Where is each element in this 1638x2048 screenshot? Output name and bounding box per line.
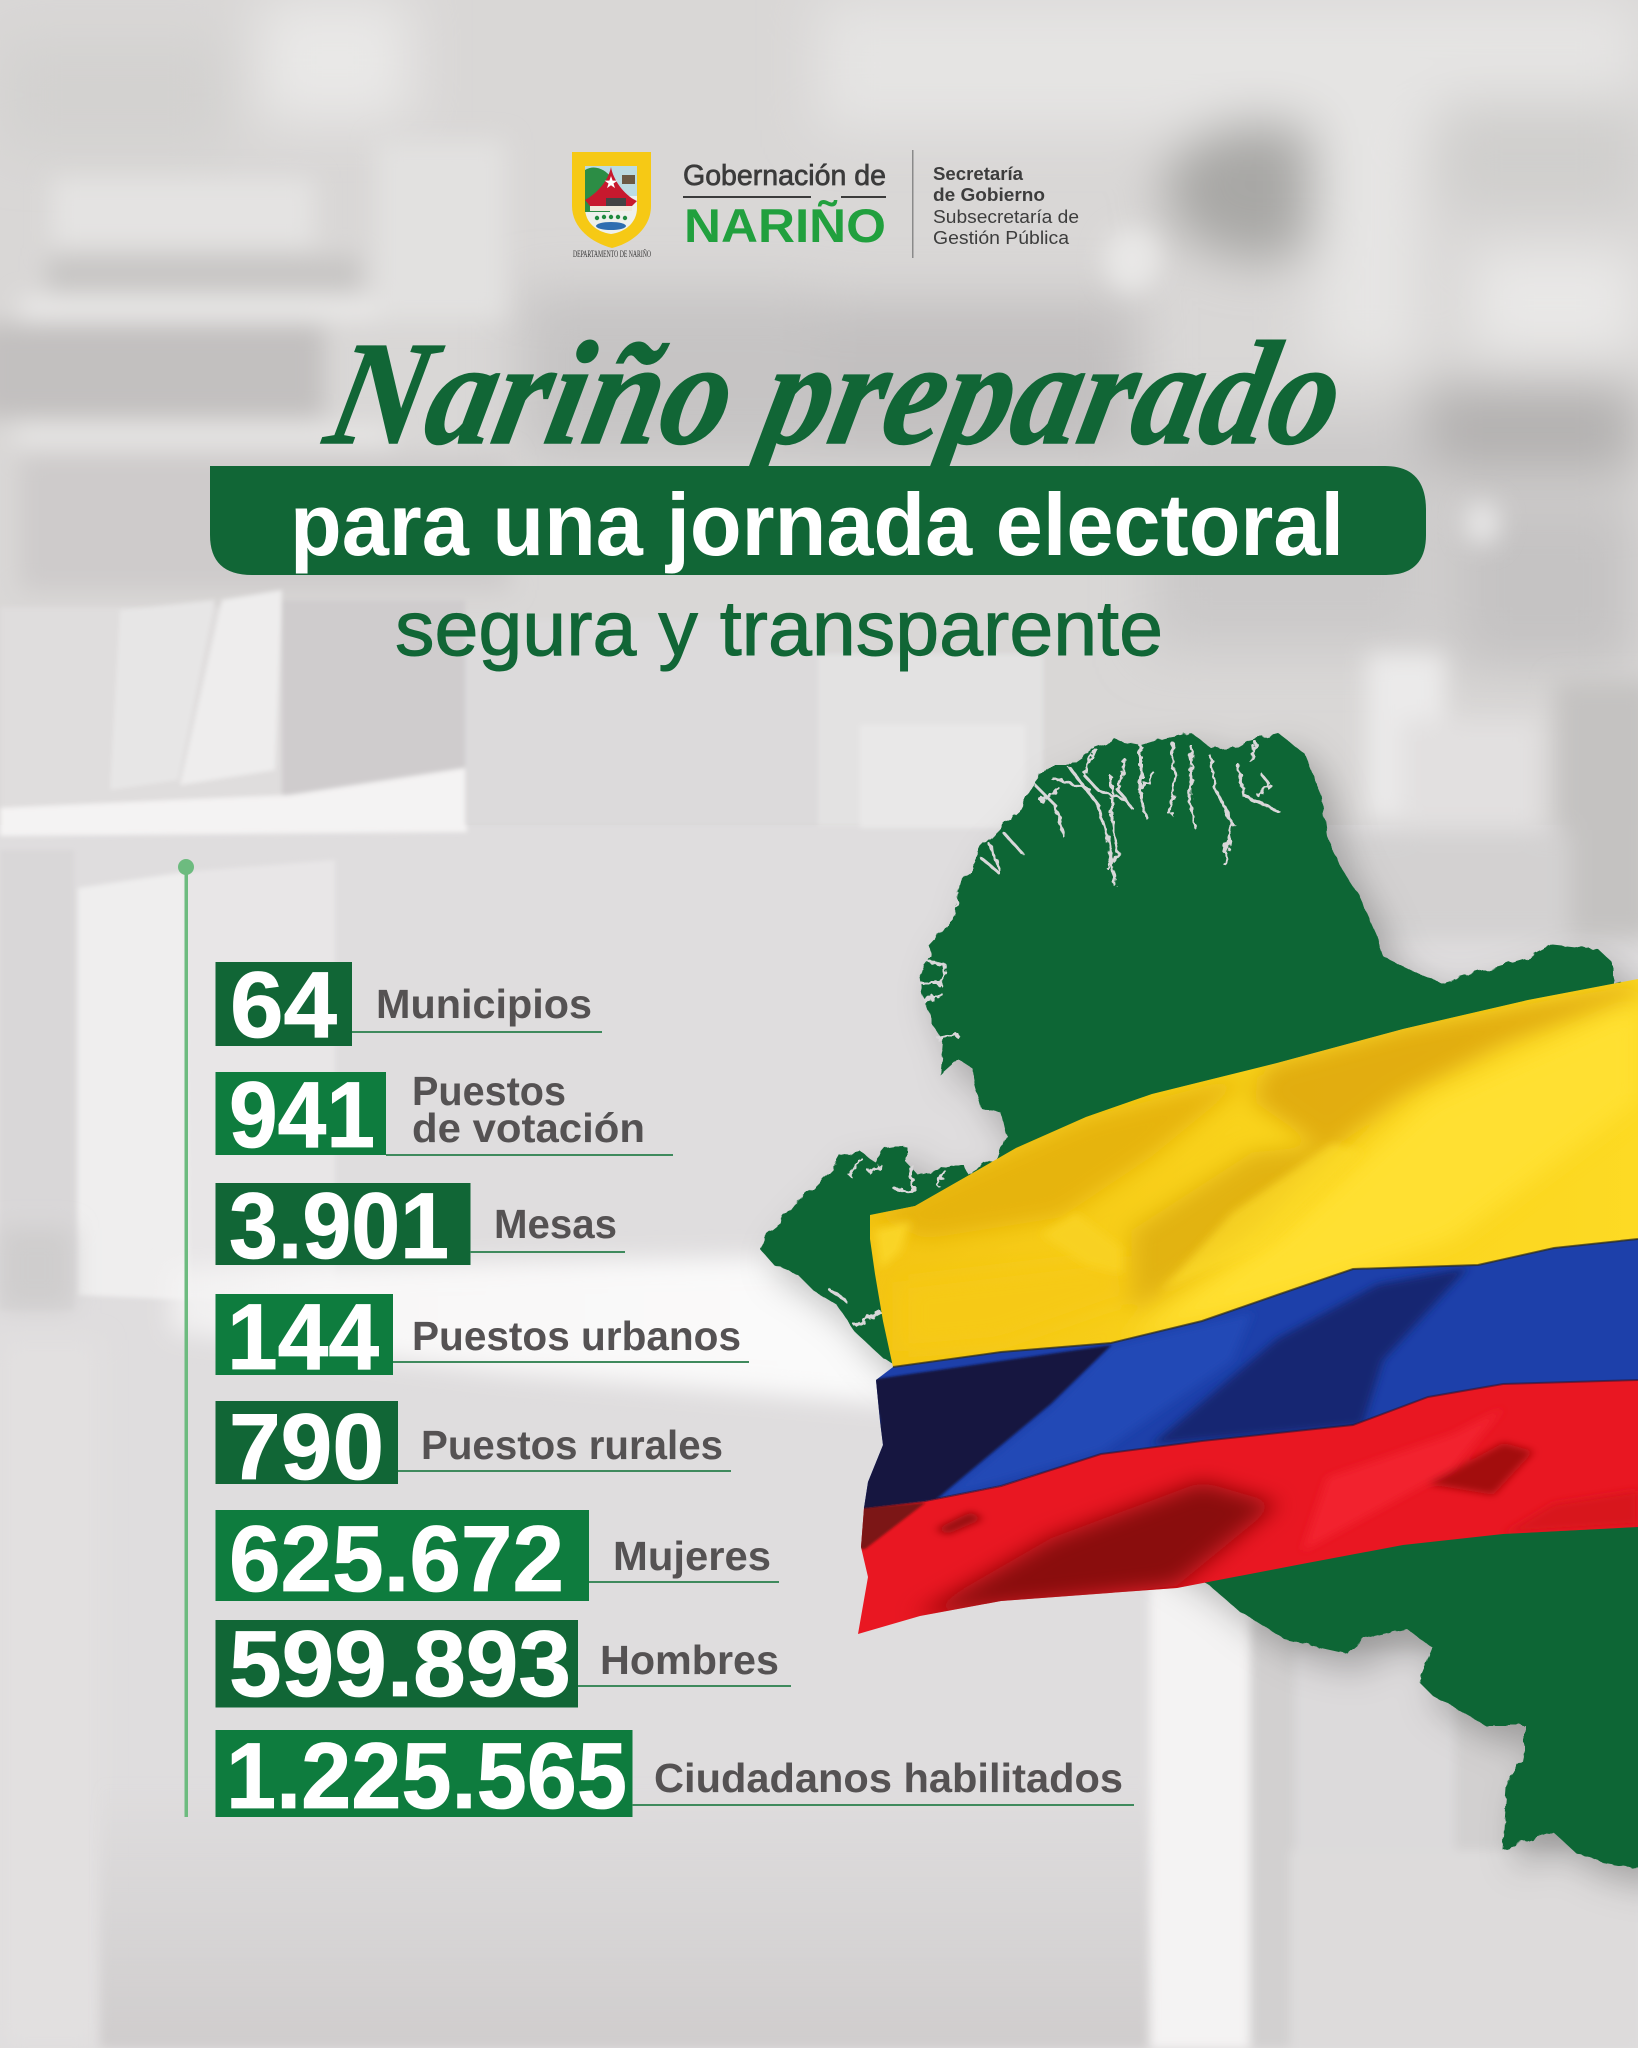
stat: 64 Municipios: Municipios [376, 981, 592, 1027]
stat: 3.901 Mesas: 3.901 [229, 1173, 449, 1278]
stat: 790 Puestos rurales: Puestos rurales [421, 1422, 723, 1468]
text: Secretaría de Gobierno [933, 164, 1079, 248]
map: Nariño department [760, 733, 1638, 1872]
stat: 144 Puestos urbanos [216, 1284, 749, 1389]
flag blue stripe [864, 1239, 1638, 1508]
text: Secretaría de Gobierno: Secretaría [933, 164, 1024, 184]
stat: 599.893 Hombres: 599.893 [229, 1611, 571, 1716]
subheading: segura y transparente: segura y transparente [395, 584, 1163, 672]
text: Departamento de Nariño: DEPARTAMENTO DE NARIÑO [573, 248, 651, 260]
stat: 144 Puestos urbanos: 144 [227, 1284, 379, 1389]
stat: 599.893 Hombres: Hombres [600, 1637, 779, 1683]
heading pill: para una jornada electoral: para una jornada electoral [290, 475, 1344, 574]
stat: 3.901 Mesas: Mesas [494, 1201, 617, 1247]
stat: 625.672 Mujeres: 625.672 [229, 1506, 564, 1611]
stat: 941 Puestos de votación [216, 1062, 673, 1167]
icon: department shield [572, 152, 651, 248]
flag yellow stripe [850, 960, 1638, 1380]
flag red stripe [858, 1380, 1638, 1634]
stat: 941 Puestos de votación: de votación [412, 1105, 645, 1151]
stat: 64 Municipios [216, 952, 602, 1057]
title: Nariño preparado: Nariño preparado [313, 312, 1358, 476]
logo: Gobernación de Nariño [572, 150, 1079, 260]
stat: 625.672 Mujeres [216, 1506, 779, 1611]
stat: 1.225.565 Ciudadanos habilitados: 1.225.565 [226, 1723, 627, 1828]
text: Secretaría de Gobierno: Subsecretaría de [933, 207, 1079, 227]
flag of Colombia [850, 960, 1638, 1650]
stat: 1.225.565 Ciudadanos habilitados: Ciudadanos habilitados [654, 1755, 1123, 1801]
stat: 625.672 Mujeres: Mujeres [613, 1533, 771, 1579]
stat: 599.893 Hombres [216, 1611, 791, 1716]
map rivers [830, 742, 1278, 1325]
stat: 790 Puestos rurales [216, 1394, 731, 1499]
stat: 1.225.565 Ciudadanos habilitados [216, 1723, 1134, 1828]
text: NARIÑO: NARIÑO [684, 199, 886, 252]
stat: 941 Puestos de votación: Puestos [412, 1068, 566, 1114]
stat: 941 Puestos de votación: 941 [229, 1062, 375, 1167]
stat: 144 Puestos urbanos: Puestos urbanos [412, 1313, 741, 1359]
stat: 64 Municipios: 64 [230, 952, 337, 1057]
text: Secretaría de Gobierno: de Gobierno [933, 185, 1045, 205]
stat: 3.901 Mesas [216, 1173, 625, 1278]
timeline line with dot [178, 859, 194, 1817]
text: Secretaría de Gobierno: Gestión Pública [933, 228, 1070, 248]
text: Gobernación de: Gobernación de [683, 160, 886, 192]
stat: 790 Puestos rurales: 790 [229, 1394, 384, 1499]
